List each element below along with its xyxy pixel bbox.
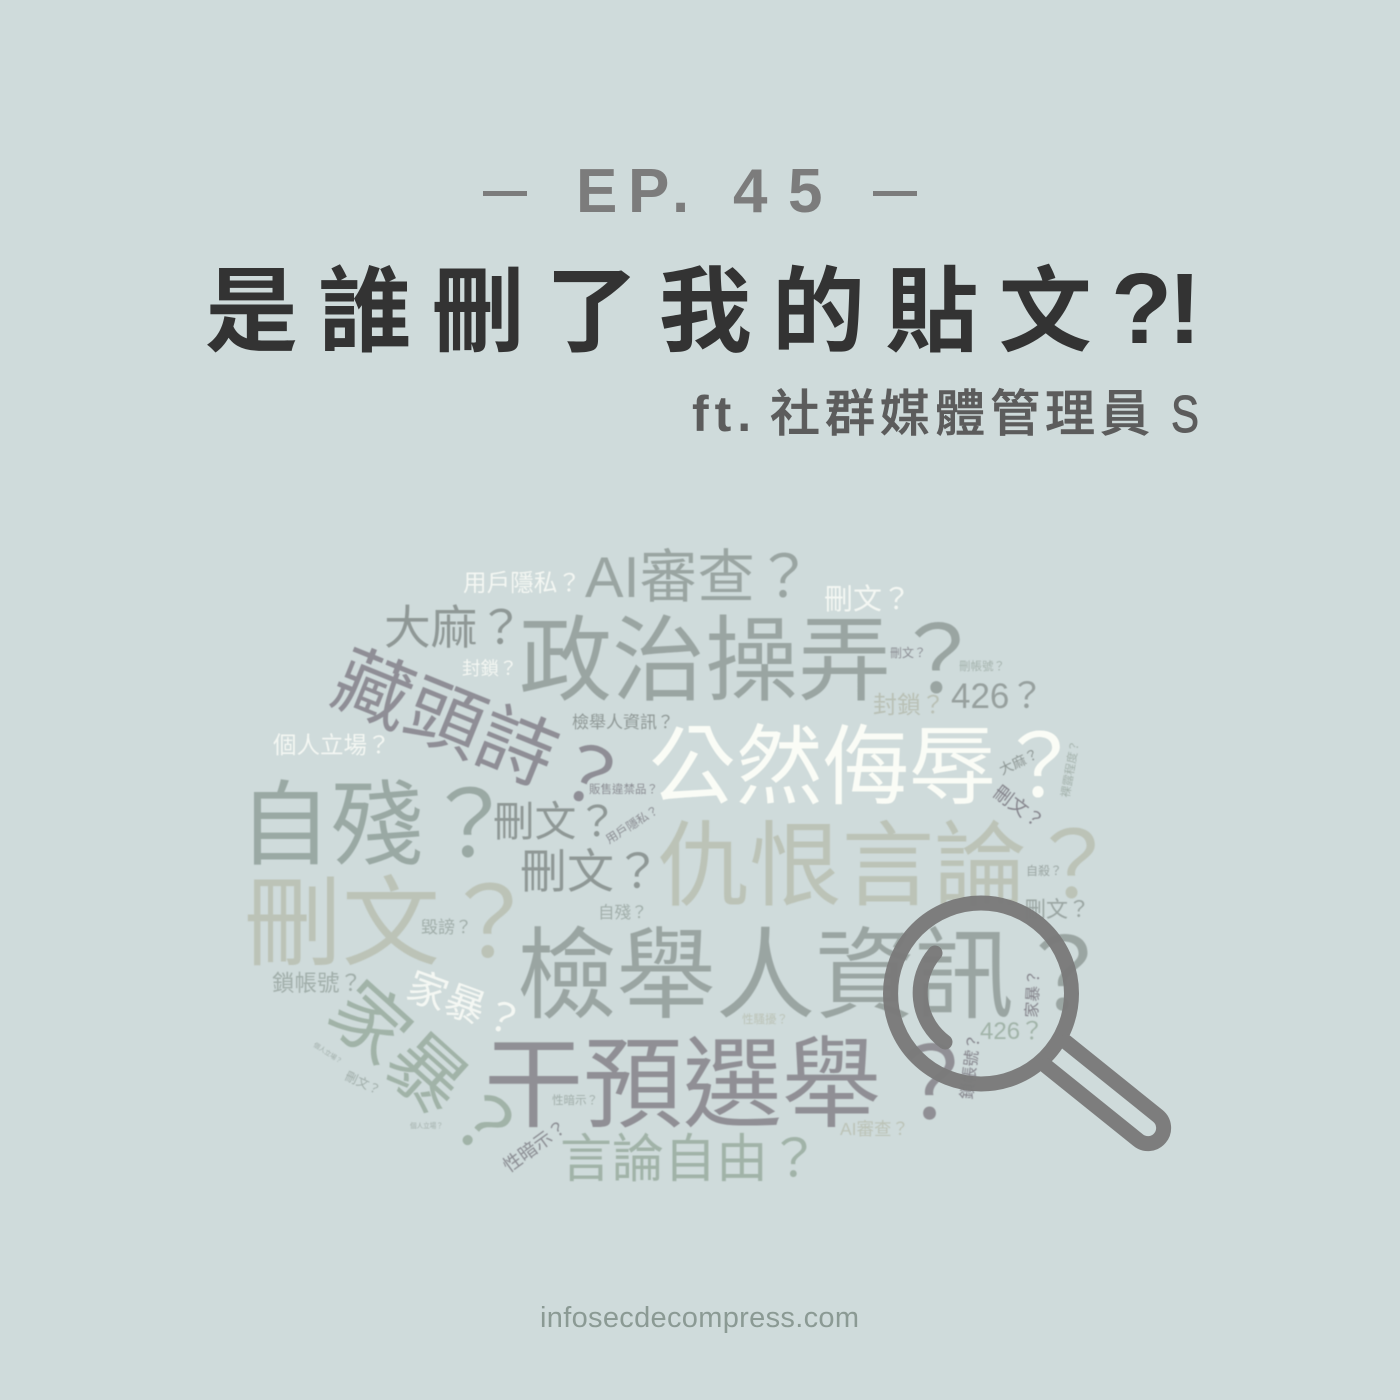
word: 刪文 medium 2: 刪文？	[520, 845, 661, 898]
word: 封鎖: 封鎖？	[873, 692, 945, 719]
word: 性暗示 small: 性暗示？	[552, 1093, 598, 1107]
word: 家暴 white: 家暴？	[401, 964, 529, 1046]
word: 性暗示 rotated: 性暗示？	[499, 1116, 571, 1176]
episode label: EP.45	[576, 157, 822, 226]
word: 大麻 rotated: 大麻？	[997, 745, 1041, 778]
word: 刪文 rotated: 刪文？	[989, 781, 1048, 833]
word: 性騷擾: 性騷擾？	[742, 1012, 788, 1026]
word: 426: 426？	[951, 677, 1044, 716]
word: 封鎖 white: 封鎖？	[462, 658, 518, 679]
title: 是誰刪了我的貼文	[205, 260, 1112, 364]
subtitle letter: S	[1171, 386, 1199, 444]
word: 個人立場: 個人立場？	[273, 732, 390, 758]
word: 426 small: 426？	[980, 1018, 1044, 1045]
word: 政治操弄: 政治操弄？	[519, 609, 984, 713]
word: 干預選舉: 干預選舉？	[484, 1030, 980, 1141]
word: 刪文 small: 刪文？	[890, 645, 926, 660]
word: 鎖帳號 vertical: 鎖帳號？	[957, 1033, 984, 1100]
word: 檢舉人資訊 large: 檢舉人資訊？	[517, 921, 1113, 1032]
word: 毀謗: 毀謗？	[421, 918, 472, 937]
title punctuation: ?!	[1111, 253, 1201, 365]
word: AI審查 small: AI審查？	[840, 1119, 909, 1139]
word: 刪文 large: 刪文？	[244, 868, 538, 978]
footer url: infosecdecompress.com	[540, 1302, 859, 1334]
word: 刪文 right: 刪文？	[1024, 897, 1090, 922]
episode dash left	[483, 191, 527, 196]
word: 檢舉人資訊 small: 檢舉人資訊？	[572, 713, 674, 732]
word cloud	[239, 546, 1119, 1189]
word: 自殺: 自殺？	[1026, 864, 1062, 878]
icon: magnifying glass	[890, 903, 1164, 1144]
word: 家暴 green: 家暴？	[313, 966, 539, 1182]
word: 刪文 white: 刪文？	[824, 583, 911, 616]
word: 刪帳號: 刪帳號？	[959, 659, 1005, 673]
word: 自殘 small: 自殘？	[598, 903, 648, 922]
episode dash right	[873, 191, 917, 196]
word: 自殘 large: 自殘？	[239, 775, 515, 877]
subtitle name: 社群媒體管理員	[770, 386, 1155, 442]
word: 用戶隱私 rotated: 用戶隱私？	[603, 803, 661, 847]
word: 個人立場 tiny rotated: 個人立場？	[312, 1040, 344, 1065]
word: 公然侮辱: 公然侮辱？	[649, 720, 1082, 816]
word: 刪文 medium: 刪文？	[493, 798, 618, 845]
word: 大麻: 大麻？	[384, 602, 524, 654]
word: 仇恨言論: 仇恨言論？	[657, 814, 1119, 918]
word: 個人立場 tiny: 個人立場？	[410, 1121, 443, 1130]
word: AI審查: AI審查？	[585, 546, 813, 610]
word: 販售違禁品: 販售違禁品？	[589, 782, 658, 796]
word: 家暴 vertical: 家暴？	[1023, 969, 1044, 1018]
word: 鎖帳號: 鎖帳號？	[272, 971, 362, 996]
word: 藏頭詩: 藏頭詩？	[322, 636, 639, 831]
subtitle prefix: ft.	[692, 386, 757, 442]
word: 用戶隱私: 用戶隱私？	[463, 570, 581, 597]
word: 裸露程度: 裸露程度？	[1058, 739, 1082, 799]
word: 言論自由: 言論自由？	[560, 1131, 820, 1189]
word: 刪文 tiny rotated: 刪文？	[343, 1068, 383, 1098]
